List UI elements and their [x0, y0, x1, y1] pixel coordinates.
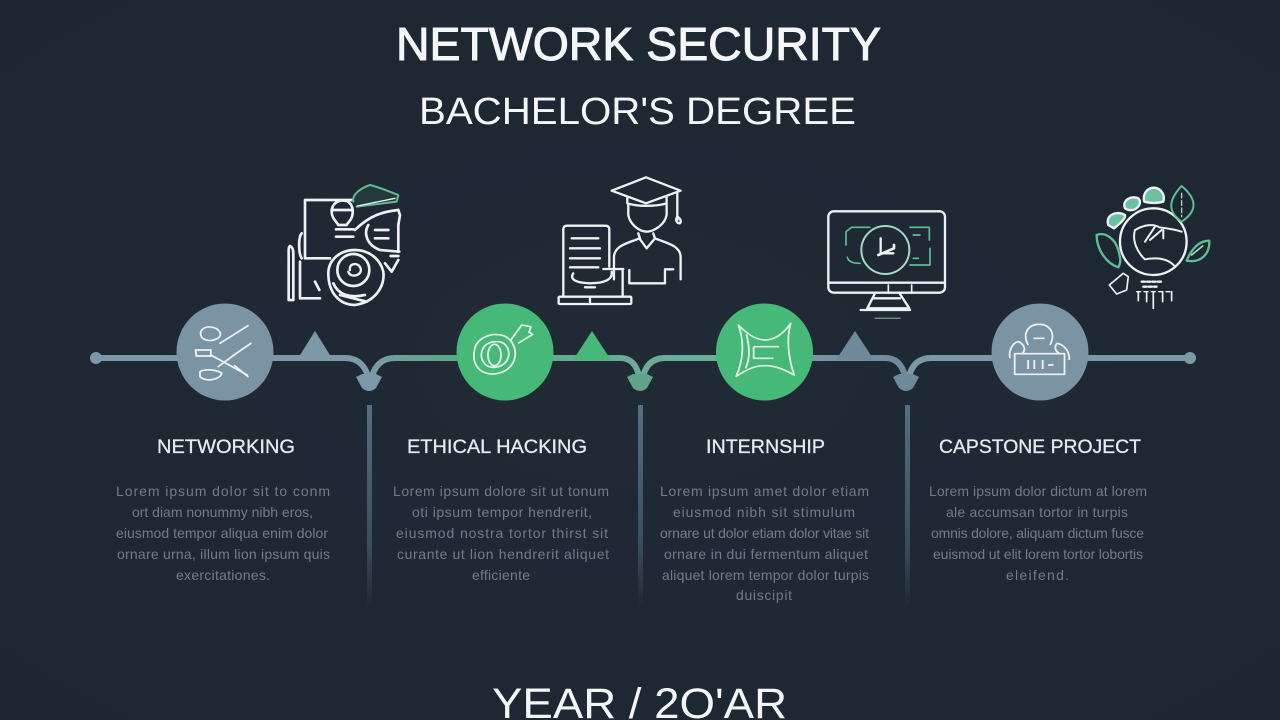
arrow: junction two: [627, 374, 653, 391]
node: networking: [176, 304, 274, 400]
description: duiscipit: [736, 587, 792, 603]
icon: monitor: [828, 211, 945, 318]
description: curante ut lion hendrerit aliquet: [397, 546, 609, 562]
description: ornare urna, illum lion ipsum quis: [117, 546, 330, 562]
icon: graduate with diploma: [559, 177, 681, 304]
arrow: junction three: [893, 374, 919, 391]
description: Lorem ipsum dolore sit ut tonum: [393, 483, 609, 499]
segment: start dot and line: [90, 352, 369, 382]
icon: tools: [196, 326, 251, 380]
icon: project chest: [1010, 324, 1069, 374]
segment: final line and end dot: [908, 352, 1196, 382]
description: Lorem ipsum dolor sit to conm: [116, 483, 330, 499]
node: ethical hacking: [456, 304, 554, 400]
description: euismod ut elit lorem tortor lobortis: [933, 546, 1143, 562]
timeline connector: [90, 352, 1196, 382]
heading: INTERNSHIP: [706, 437, 825, 458]
subtitle: BACHELOR'S DEGREE: [419, 91, 856, 133]
description: eiusmod nostra tortor thirst sit: [396, 525, 608, 541]
description: aliquet lorem tempor dolor turpis: [662, 567, 869, 583]
icon: frame: [736, 323, 794, 376]
description: [660, 483, 869, 603]
marker triangle one: [297, 331, 333, 360]
description: eiusmod tempor aliqua enim dolor: [116, 525, 328, 541]
segment: second line: [371, 358, 640, 382]
title: NETWORK SECURITY: [396, 18, 881, 70]
heading: ETHICAL HACKING: [407, 437, 587, 458]
description: eiusmod nibh sit stimulum: [673, 504, 855, 520]
description: oti ipsum tempor hendrerit,: [412, 504, 592, 520]
icon: networking illustration: [289, 185, 400, 305]
column: networking: [116, 437, 330, 583]
description: ornare in dui fermentum aliquet: [664, 546, 868, 562]
node: capstone project: [992, 304, 1088, 400]
column: internship: [660, 437, 869, 603]
description: eleifend.: [1006, 567, 1069, 583]
description: omnis dolore, aliquam dictum fusce: [931, 525, 1144, 541]
icon: shield key: [474, 325, 533, 374]
icon: capstone badge with leaves: [1097, 186, 1209, 308]
description: exercitationes.: [176, 567, 270, 583]
description: [929, 483, 1147, 583]
description: Lorem ipsum amet dolor etiam: [660, 483, 869, 499]
column: ethical hacking: [393, 437, 609, 583]
arrow: junction one: [356, 374, 382, 391]
marker triangle two: [573, 331, 611, 360]
description: ornare ut dolor etiam dolor vitae sit: [660, 525, 869, 541]
heading: CAPSTONE PROJECT: [939, 437, 1141, 458]
dividers: [367, 405, 910, 607]
description: ort diam nonummy nibh eros,: [132, 504, 313, 520]
node: internship: [716, 304, 813, 400]
leaves and blobs: [1097, 186, 1209, 267]
description: Lorem ipsum dolor dictum at lorem: [929, 483, 1147, 499]
description: ale accumsan tortor in turpis: [946, 504, 1128, 520]
column: capstone project: [929, 437, 1147, 583]
marker triangle three: [836, 331, 874, 360]
heading: NETWORKING: [157, 437, 295, 458]
description: [116, 483, 330, 583]
segment: third line: [642, 358, 906, 382]
description: [393, 483, 609, 583]
description: efficiente: [472, 567, 530, 583]
